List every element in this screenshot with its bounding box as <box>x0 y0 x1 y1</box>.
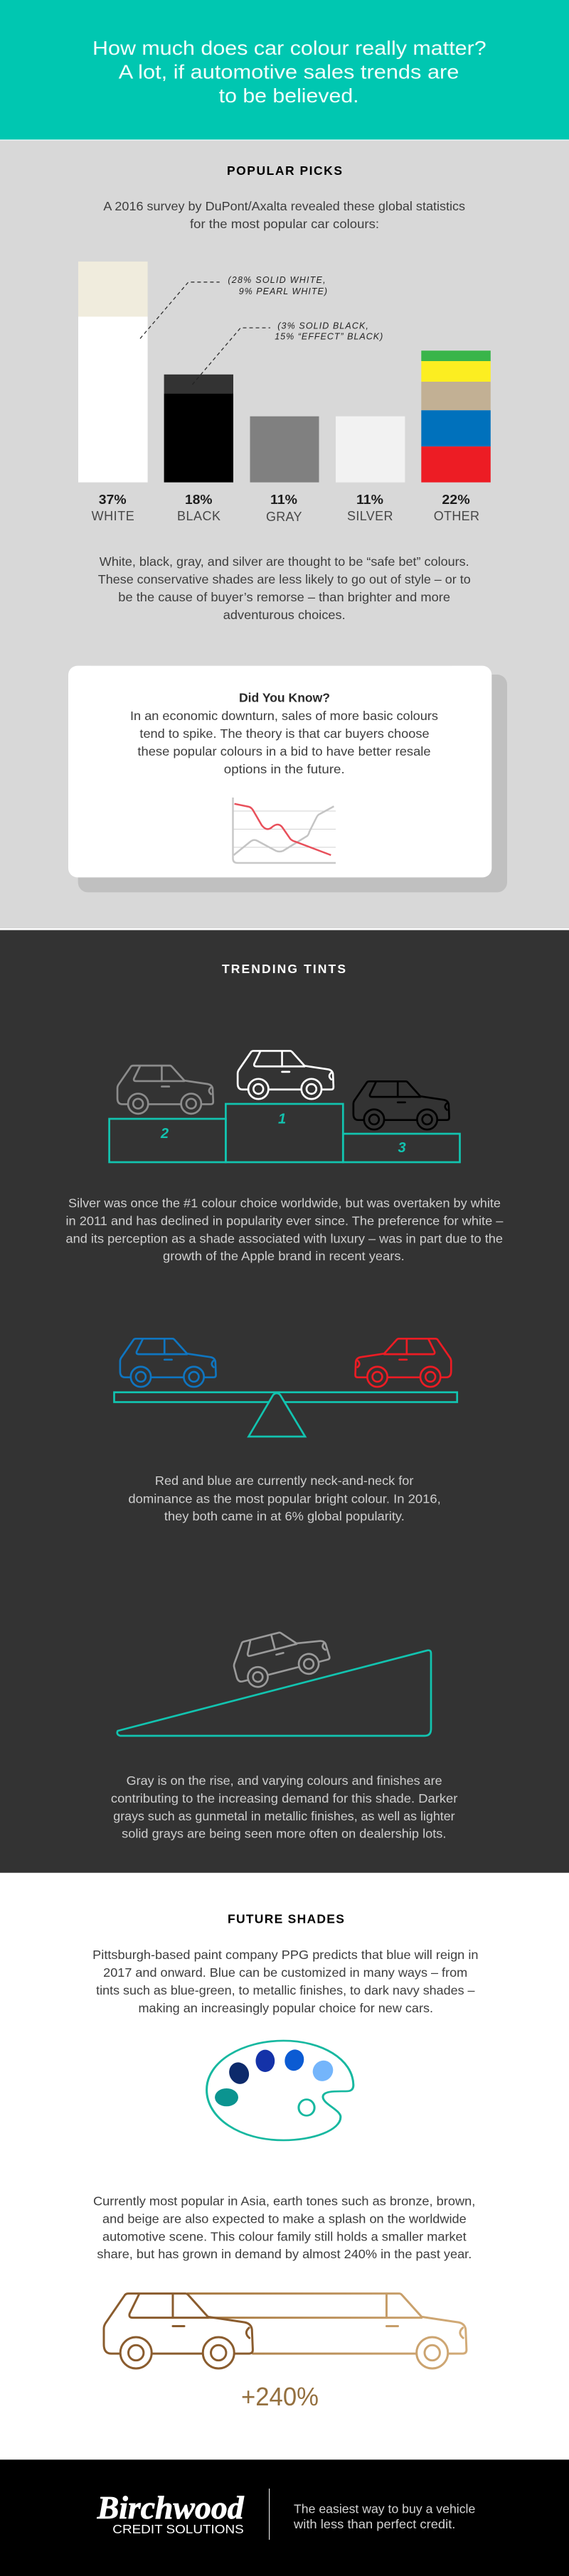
card text: these popular colours in a bid to have better resale <box>137 744 431 758</box>
bar: other <box>421 350 491 483</box>
panel: did you know card <box>68 666 491 877</box>
panel: popular picks <box>0 141 569 928</box>
title: A lot, if automotive sales trends are <box>119 60 459 82</box>
label: black: BLACK <box>177 509 220 523</box>
heading: future shades: FUTURE SHADES <box>228 1912 344 1926</box>
stat: +240%: +240% <box>241 2382 319 2411</box>
text: silver and white: Silver was once the #1 colour choice worldwide, but was overtaken by white <box>68 1196 501 1210</box>
text: earth tones <box>93 2194 475 2261</box>
podium numbers: 1 <box>278 1112 286 1127</box>
text: safe bet colours: These conservative shades are less likely to go out of style – or to <box>98 572 471 586</box>
card heading: Did You Know? <box>239 691 330 705</box>
text: blue prediction: Pittsburgh-based paint company PPG predicts that blue will reign in <box>92 1948 478 1962</box>
podium <box>110 1104 459 1162</box>
text: gray on the rise <box>111 1773 458 1841</box>
card text: tend to spike. The theory is that car buyers choose <box>139 726 430 741</box>
label: silver <box>347 493 393 523</box>
text: silver and white: in 2011 and has declined in popularity ever since. The preference for white – <box>65 1213 504 1228</box>
car outline <box>104 2294 252 2368</box>
text: gray on the rise: solid grays are being seen more often on dealership lots. <box>122 1827 446 1841</box>
intro text: A 2016 survey by DuPont/Axalta revealed these global statistics <box>103 199 465 213</box>
panel: future shades <box>0 1874 569 2459</box>
title <box>92 37 486 107</box>
label: silver: 11% <box>356 493 383 507</box>
text: silver and white <box>65 1196 504 1263</box>
callout: black breakdown: 15% “EFFECT” BLACK) <box>275 332 383 342</box>
icon: car on incline <box>228 1622 332 1692</box>
text: earth tones: automotive scene. This colour family still holds a smaller market <box>102 2230 467 2244</box>
tagline <box>293 2502 475 2531</box>
text: blue prediction <box>92 1948 478 2015</box>
tagline: with less than perfect credit. <box>293 2517 455 2531</box>
limo outline <box>188 2294 467 2368</box>
text: silver and white: and its perception as a shade associated with luxury – was in part due to the <box>65 1231 503 1245</box>
text: red and blue: they both came in at 6% global popularity. <box>164 1509 405 1523</box>
card text: options in the future. <box>224 762 345 776</box>
text: earth tones: share, but has grown in demand by almost 240% in the past year. <box>97 2247 472 2261</box>
callout: white breakdown: 9% PEARL WHITE) <box>239 286 327 296</box>
card text: In an economic downturn, sales of more basic colours <box>130 709 438 723</box>
bar: gray <box>250 417 319 483</box>
label: white: 37% <box>99 493 127 507</box>
intro text: for the most popular car colours: <box>190 217 379 231</box>
intro text <box>103 199 465 231</box>
tagline: The easiest way to buy a vehicle <box>294 2502 475 2516</box>
text: safe bet colours <box>98 554 471 622</box>
text: blue prediction: making an increasingly popular choice for new cars. <box>138 2001 433 2015</box>
panel: header <box>0 0 569 139</box>
text: red and blue <box>128 1474 441 1523</box>
seesaw <box>114 1392 457 1437</box>
icon: white car <box>238 1051 334 1099</box>
label: black <box>177 493 220 523</box>
card text <box>130 709 438 776</box>
text: silver and white: growth of the Apple brand in recent years. <box>163 1249 405 1263</box>
label: white: WHITE <box>92 509 134 523</box>
callout: white breakdown: (28% SOLID WHITE, <box>228 275 326 285</box>
text: safe bet colours: be the cause of buyer’s remorse – than brighter and more <box>118 590 450 604</box>
incline ramp <box>117 1651 431 1736</box>
icon: stretched limo over brown car <box>104 2294 467 2368</box>
text: gray on the rise: contributing to the increasing demand for this shade. Darker <box>111 1791 458 1805</box>
text: red and blue: dominance as the most popular bright colour. In 2016, <box>128 1491 441 1506</box>
heading: trending tints: TRENDING TINTS <box>222 962 346 976</box>
line chart icon <box>233 798 336 863</box>
podium numbers <box>160 1112 406 1156</box>
bar: black <box>164 375 233 483</box>
label: silver: SILVER <box>347 509 393 523</box>
text: gray on the rise: Gray is on the rise, and varying colours and finishes are <box>127 1773 442 1788</box>
text: blue prediction: 2017 and onward. Blue can be customized in many ways – from <box>103 1965 467 1980</box>
callout: white breakdown <box>140 275 327 338</box>
label: white <box>92 493 134 523</box>
text: safe bet colours: White, black, gray, and silver are thought to be “safe bet” colours. <box>100 554 469 569</box>
label: gray <box>266 493 302 524</box>
label: black: 18% <box>185 493 212 507</box>
panel: trending tints <box>0 930 569 1873</box>
label: other <box>434 493 479 523</box>
label: gray: 11% <box>270 493 297 507</box>
bar: white <box>78 262 148 483</box>
panel: footer <box>0 2459 569 2576</box>
label: other: 22% <box>442 493 470 507</box>
podium numbers: 3 <box>398 1140 406 1156</box>
title: How much does car colour really matter? <box>92 37 486 59</box>
bar labels <box>92 493 479 524</box>
callout: black breakdown <box>192 321 383 385</box>
icon: black car <box>353 1081 450 1129</box>
icon: red car <box>356 1338 451 1387</box>
text: earth tones: and beige are also expected to make a splash on the worldwide <box>102 2212 467 2226</box>
heading: popular picks: POPULAR PICKS <box>227 163 342 178</box>
text: safe bet colours: adventurous choices. <box>223 608 346 622</box>
podium numbers: 2 <box>160 1126 169 1142</box>
title: to be believed. <box>219 85 359 107</box>
icon: gray car <box>117 1066 213 1114</box>
label: gray: GRAY <box>266 510 302 524</box>
card shadow <box>78 675 507 892</box>
text: gray on the rise: grays such as gunmetal in metallic finishes, as well as lighter <box>113 1809 455 1823</box>
divider <box>269 2489 270 2540</box>
text: red and blue: Red and blue are currently neck-and-neck for <box>155 1474 414 1488</box>
icon: paint palette <box>207 2041 353 2140</box>
logo: CREDIT SOLUTIONS <box>112 2522 244 2536</box>
bar chart <box>78 262 491 483</box>
text: earth tones: Currently most popular in Asia, earth tones such as bronze, brown, <box>93 2194 475 2209</box>
icon: blue car <box>120 1338 216 1387</box>
logo: Birchwood <box>97 2489 245 2526</box>
callout: black breakdown: (3% SOLID BLACK, <box>277 321 368 331</box>
text: blue prediction: tints such as blue-green, to metallic finishes, to dark navy shades – <box>96 1983 475 1997</box>
label: other: OTHER <box>434 509 479 523</box>
bar: silver <box>336 417 405 483</box>
